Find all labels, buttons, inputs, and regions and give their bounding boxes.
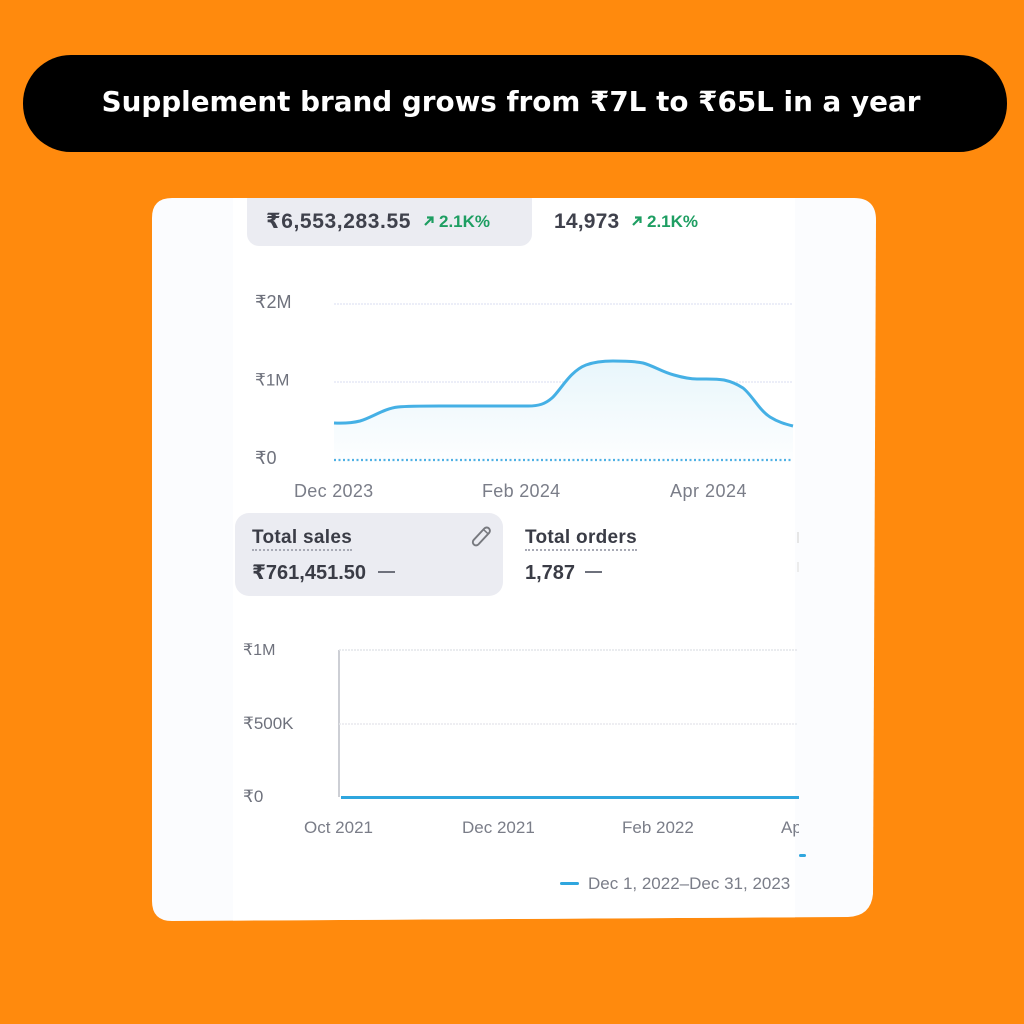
line chart: top <box>256 294 794 501</box>
label: Total sales <box>252 527 352 548</box>
line chart: top: ₹1M <box>255 370 289 390</box>
metric tab: total sales top <box>247 198 532 246</box>
line chart: bottom: Dec 2021 <box>462 818 535 837</box>
title banner <box>23 55 1007 152</box>
line chart: top: ₹2M <box>255 292 291 312</box>
orders value: 14,973 <box>554 210 619 233</box>
line chart: bottom <box>244 643 806 892</box>
icon: growth arrow <box>632 216 642 226</box>
line chart: bottom: ₹1M <box>243 642 275 659</box>
line chart: bottom: Oct 2021 <box>304 818 373 837</box>
line chart: top: Dec 2023 <box>294 481 373 501</box>
metric: total orders bottom <box>525 529 637 582</box>
value: ₹761,451.50 <box>252 562 366 584</box>
panel: analytics screenshot <box>152 198 876 921</box>
metric: orders top <box>555 214 698 232</box>
line chart: bottom: Apr <box>781 818 808 837</box>
white content area <box>233 917 795 921</box>
dash <box>585 571 602 573</box>
line chart: bottom: Dec 1, 2022–Dec 31, 2023 <box>588 874 790 893</box>
line chart: top: Apr 2024 <box>670 481 747 501</box>
line chart: bottom: Feb 2022 <box>622 818 694 837</box>
metric growth: 2.1K% <box>439 212 490 231</box>
line chart: bottom: ₹500K <box>243 714 294 733</box>
line chart: bottom: ₹0 <box>243 787 263 806</box>
icon: pencil <box>472 526 491 546</box>
dash <box>378 571 395 573</box>
label: Total orders <box>525 527 637 548</box>
orders growth: 2.1K% <box>647 212 698 231</box>
metric tab: total sales bottom <box>235 513 503 596</box>
line chart: top: ₹0 <box>255 448 276 468</box>
clipped metric marks <box>797 532 799 572</box>
icon: growth arrow <box>424 216 434 226</box>
title: Supplement brand grows from ₹7L to ₹65L in a year <box>102 85 920 118</box>
value: 1,787 <box>525 562 575 584</box>
line chart: top: Feb 2024 <box>482 481 560 501</box>
metric value: ₹6,553,283.55 <box>266 210 411 233</box>
